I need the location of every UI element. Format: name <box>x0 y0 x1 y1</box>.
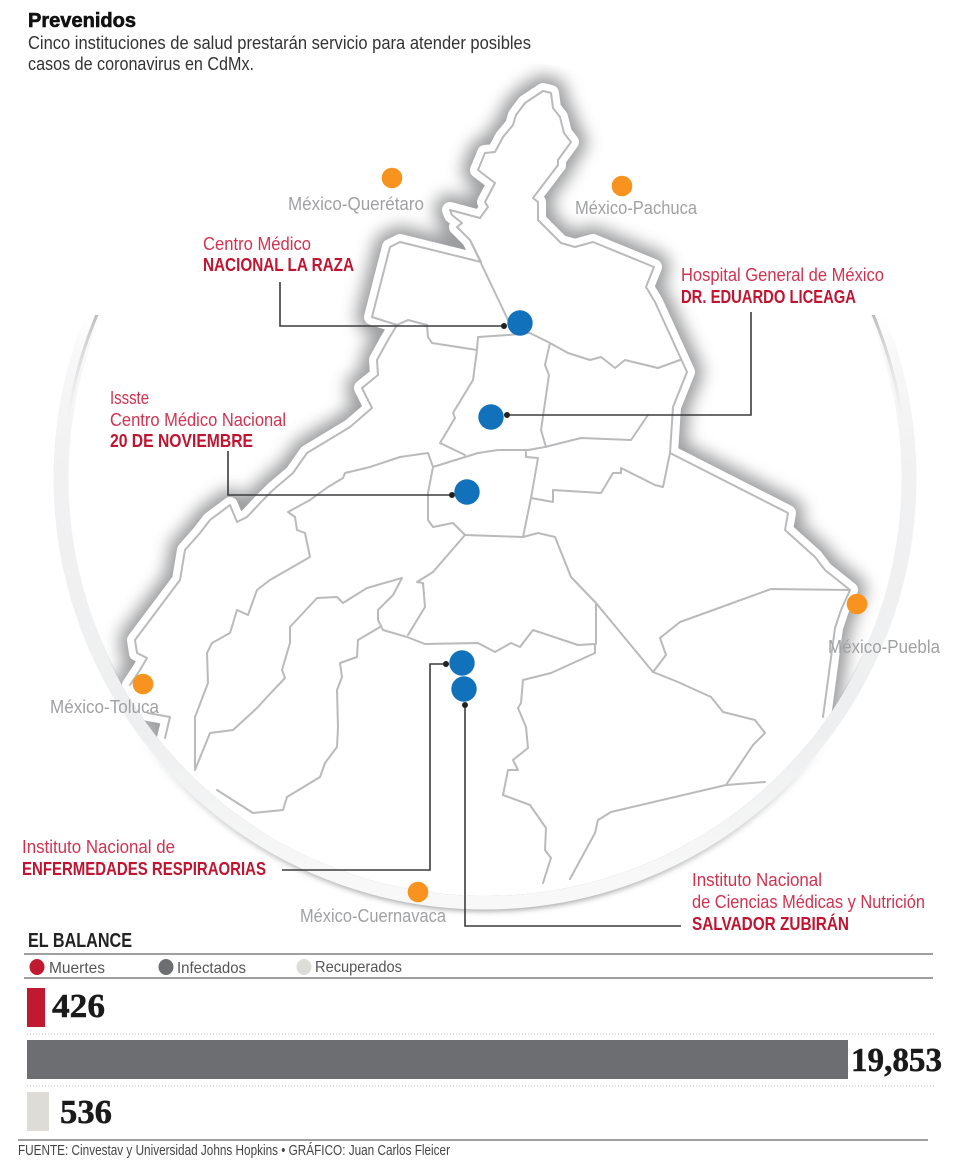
circle frame <box>54 315 916 915</box>
label: La Raza: Centro Médico <box>203 234 311 254</box>
bar: Infectados: 19,853 <box>851 1042 942 1079</box>
legend: Muertes <box>49 960 105 977</box>
label: Enfermedades Respiratorias <box>22 837 266 879</box>
legend: Recuperados <box>315 959 402 976</box>
label: La Raza <box>203 234 354 275</box>
bar: Recuperados <box>27 1092 112 1131</box>
bar chart <box>27 988 942 1131</box>
label: 20 de Noviembre: 20 DE NOVIEMBRE <box>110 431 253 451</box>
label: 20 de Noviembre: Centro Médico Nacional <box>110 410 286 430</box>
map borders <box>130 91 850 883</box>
highway markers <box>133 168 867 902</box>
heading: El Balance: EL BALANCE <box>28 930 132 952</box>
hospital markers <box>449 310 533 702</box>
label: La Raza: NACIONAL LA RAZA <box>203 255 354 275</box>
bar: Recuperados: 536 <box>60 1094 112 1131</box>
leader line: Salvador Zubirán <box>462 702 681 926</box>
label: Salvador Zubirán: SALVADOR ZUBIRÁN <box>692 913 849 934</box>
legend: Infectados <box>177 960 246 977</box>
label: Hospital General: DR. EDUARDO LICEAGA <box>681 287 856 307</box>
title: Prevenidos <box>28 10 136 32</box>
highway labels: México-Querétaro <box>288 194 424 214</box>
leader line: 20 de Noviembre <box>228 451 455 498</box>
highway labels: México-Puebla <box>828 637 941 657</box>
source line: FUENTE: Cinvestav y Universidad Johns Hopkins • GRÁFICO: Juan Carlos Fleicer <box>18 1142 450 1159</box>
highway labels <box>50 194 941 926</box>
label: 20 de Noviembre: Issste <box>110 388 149 408</box>
map white base <box>130 91 850 960</box>
leader line: La Raza <box>280 282 507 329</box>
leader line: Enfermedades Respiratorias <box>282 661 449 870</box>
label: Salvador Zubirán: Instituto Nacional <box>692 870 822 890</box>
bar: Muertes <box>27 988 105 1027</box>
label: Enfermedades Respiratorias: ENFERMEDADES RESPIRAORIAS <box>22 859 266 879</box>
bar: Infectados <box>27 1040 942 1079</box>
bar: Muertes: 426 <box>52 988 105 1025</box>
highway labels: México-Toluca <box>50 697 160 717</box>
legend <box>24 954 933 978</box>
label: Salvador Zubirán: de Ciencias Médicas y Nutrición <box>692 892 925 912</box>
map of Mexico City <box>130 91 850 960</box>
subtitle <box>28 33 531 74</box>
label: Salvador Zubirán <box>692 870 925 934</box>
subtitle: casos de coronavirus en CdMx. <box>28 54 254 74</box>
label: Hospital General <box>681 265 884 307</box>
map shadow <box>130 91 850 960</box>
highway labels: México-Pachuca <box>575 198 698 218</box>
label: Hospital General: Hospital General de México <box>681 265 884 285</box>
highway labels: México-Cuernavaca <box>300 906 447 926</box>
label: Enfermedades Respiratorias: Instituto Nacional de <box>22 837 175 857</box>
label: 20 de Noviembre <box>110 388 286 451</box>
subtitle: Cinco instituciones de salud prestarán servicio para atender posibles <box>28 33 531 53</box>
leader line: Hospital General <box>504 312 751 418</box>
